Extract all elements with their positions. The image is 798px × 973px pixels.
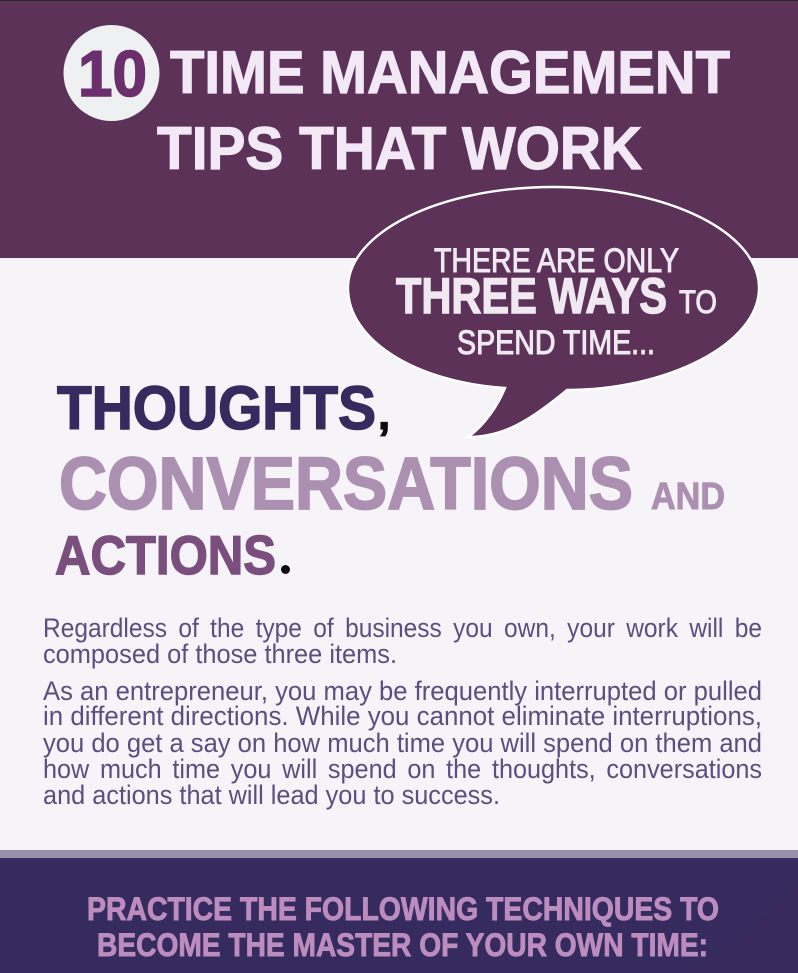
comma: , bbox=[378, 390, 390, 439]
heading: thoughts, conversations and actions bbox=[55, 374, 725, 586]
icon: number 10 badge: 10 bbox=[78, 37, 147, 110]
title bbox=[64, 25, 730, 182]
period bbox=[281, 565, 290, 574]
word: actions: ACTIONS bbox=[55, 524, 276, 586]
bubble shape bbox=[348, 187, 759, 437]
paragraph 1 bbox=[43, 613, 762, 669]
paragraph 2 bbox=[43, 676, 762, 810]
paragraph 2: and actions that will lead you to success. bbox=[43, 780, 500, 810]
paragraph 2: As an entrepreneur, you may be frequently interrupted or pulled bbox=[43, 676, 762, 706]
bubble text line 2: THREE WAYS bbox=[396, 268, 667, 324]
speech bubble bbox=[348, 187, 759, 437]
bubble text line 3: SPEND TIME... bbox=[457, 324, 655, 362]
footer band bbox=[0, 850, 798, 973]
body text bbox=[43, 613, 762, 810]
paragraph 1: composed of those three items. bbox=[43, 639, 397, 669]
bubble text line 1: THERE ARE ONLY bbox=[434, 242, 679, 280]
title line 2: TIPS THAT WORK bbox=[157, 115, 642, 182]
footer heading line 2: BECOME THE MASTER OF YOUR OWN TIME: bbox=[97, 927, 708, 963]
title line 1: TIME MANAGEMENT bbox=[170, 39, 730, 106]
paragraph 2: how much time you will spend on the thoughts, conversations bbox=[43, 754, 762, 784]
word: conversations: CONVERSATIONS bbox=[59, 442, 633, 525]
word: and: AND bbox=[651, 476, 725, 518]
header banner bbox=[0, 0, 798, 258]
word: thoughts: THOUGHTS bbox=[57, 374, 376, 442]
footer heading line 1: PRACTICE THE FOLLOWING TECHNIQUES TO bbox=[87, 891, 719, 927]
bubble text: to: TO bbox=[679, 284, 717, 320]
paragraph 2: you do get a say on how much time you will spend on them and bbox=[43, 728, 762, 758]
paragraph 2: in different directions. While you cannot eliminate interruptions, bbox=[43, 701, 762, 731]
icon: number 10 badge bbox=[64, 25, 160, 121]
